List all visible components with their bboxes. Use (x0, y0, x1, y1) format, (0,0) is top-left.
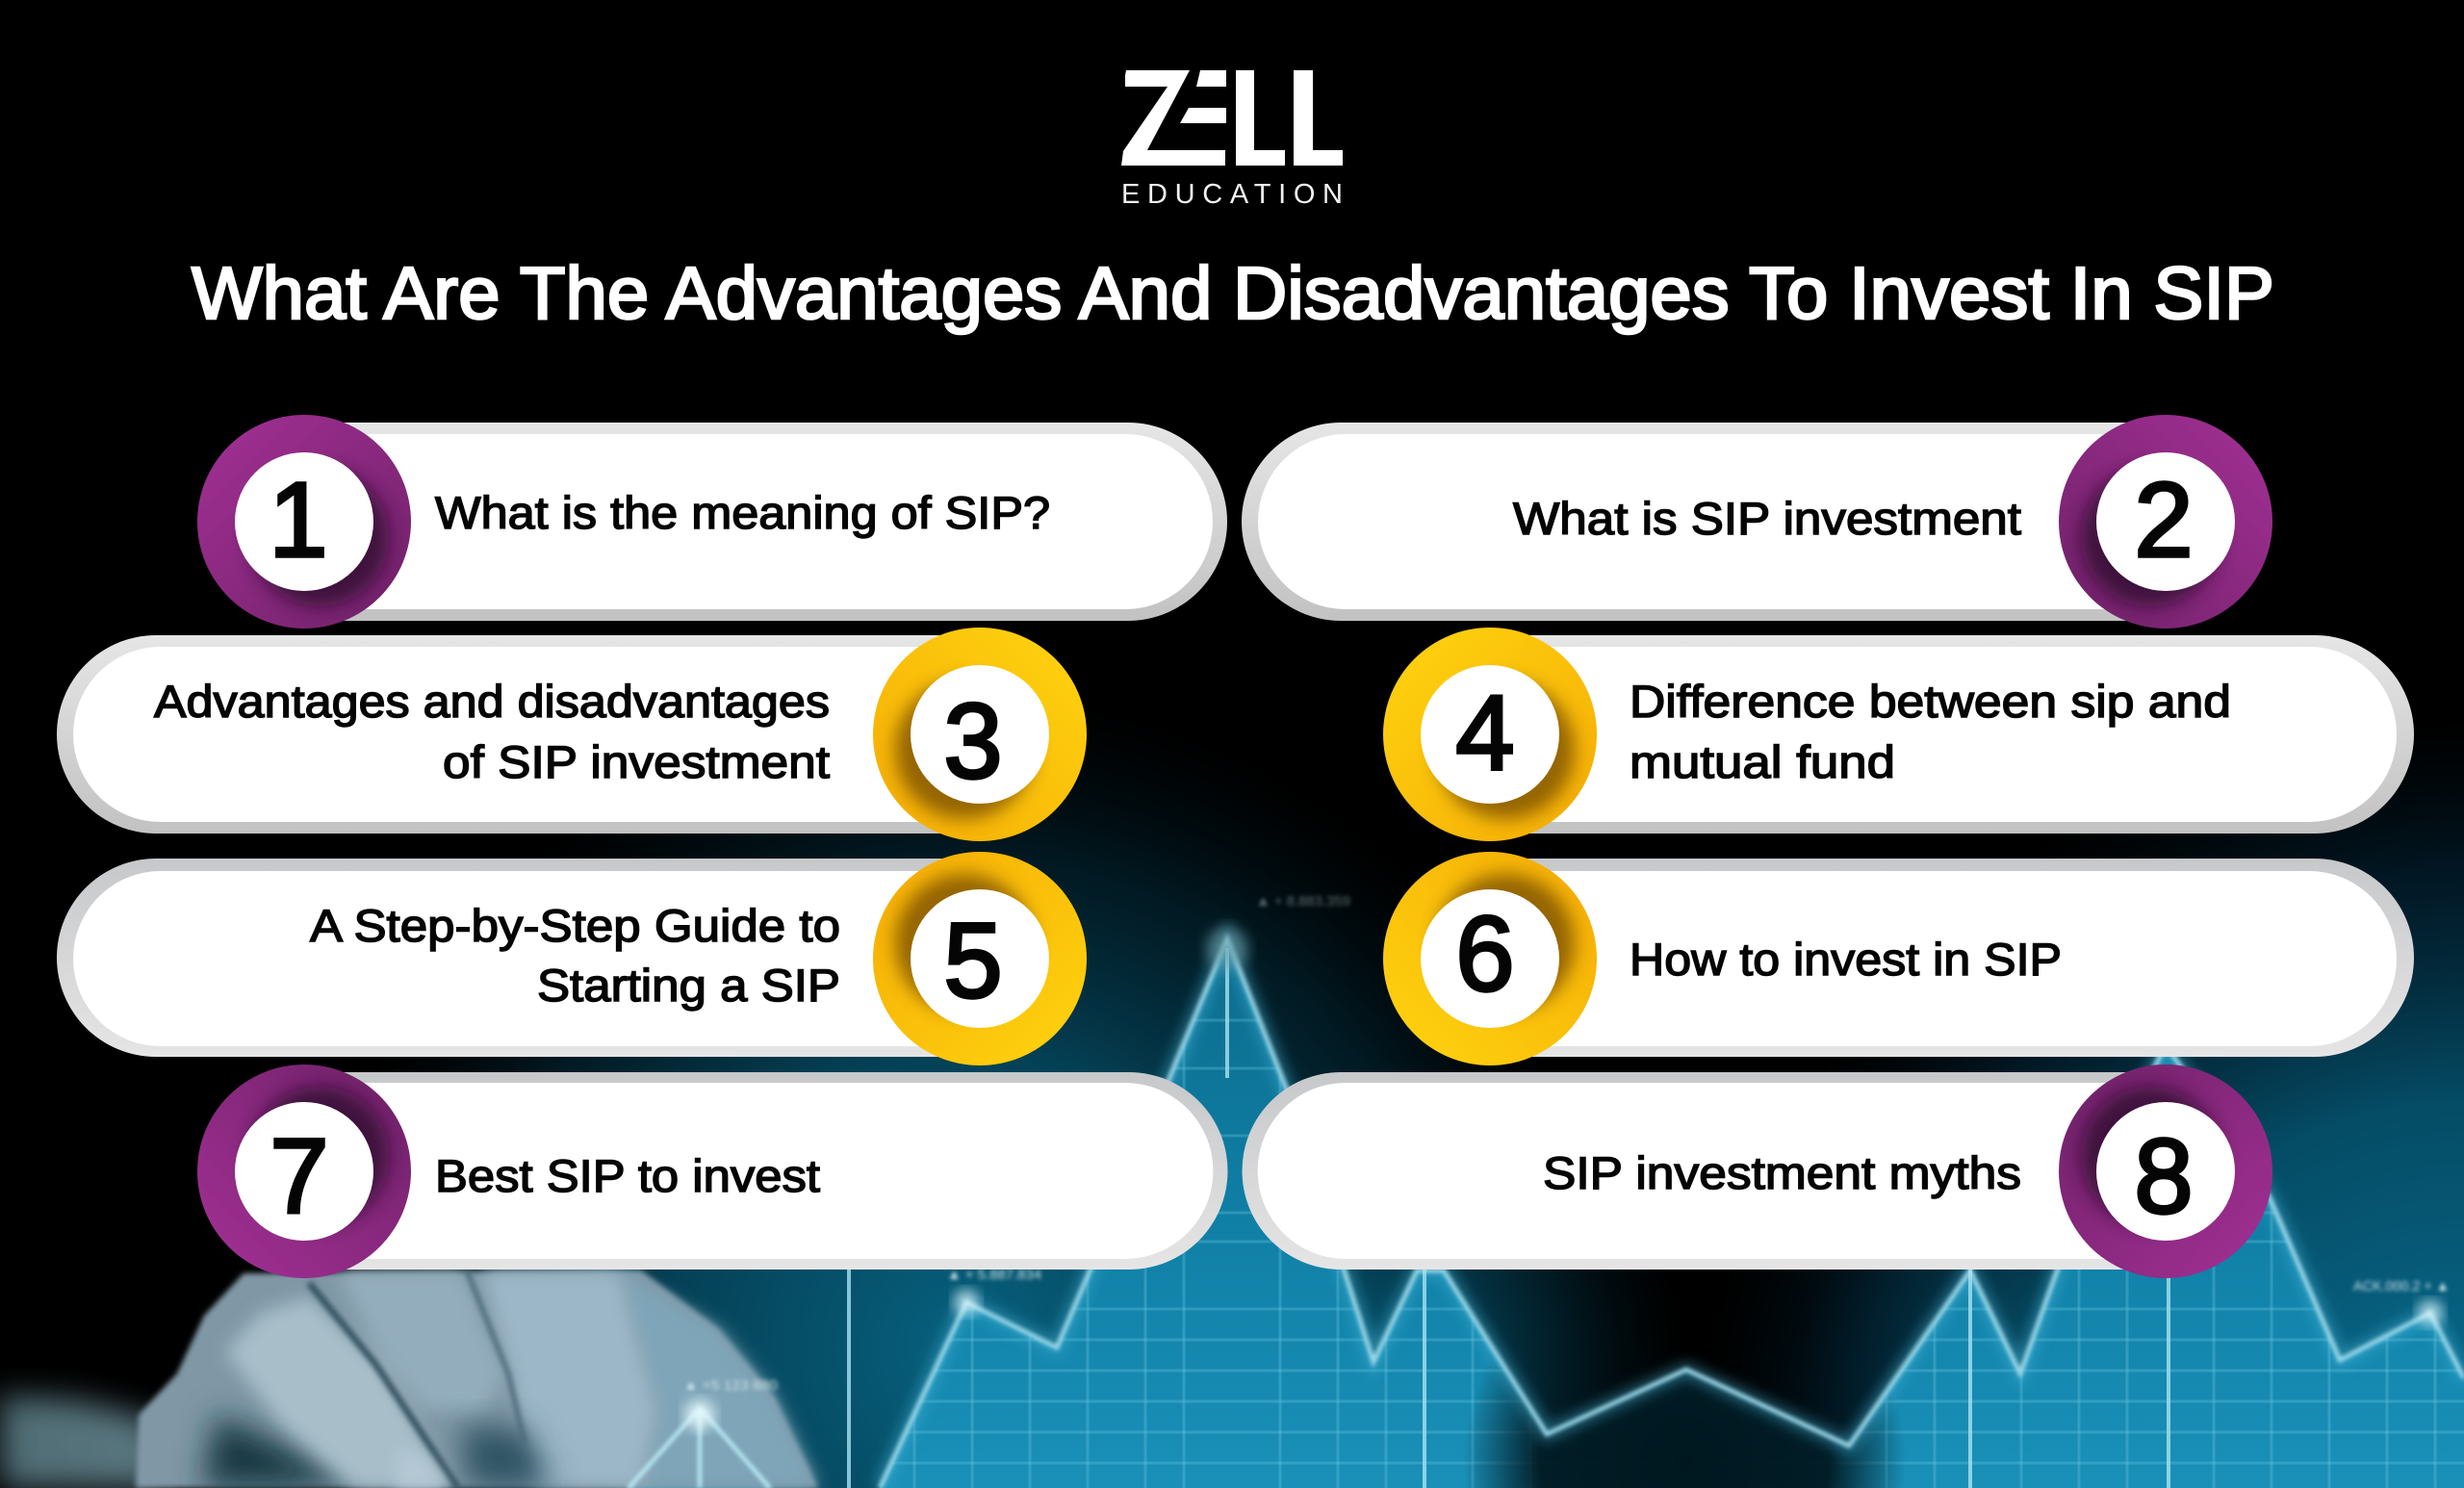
item 4: Difference between sip and mutual fund (1383, 628, 2414, 841)
item 4: Difference between sip and mutual fund: Difference between sip and (1630, 676, 2231, 727)
item 1: What is the meaning of SIP?: 1 (269, 461, 328, 579)
item 2: What is SIP investment: 2 (2134, 461, 2194, 579)
item 5: A Step-by-Step Guide to Starting a SIP: A Step-by-Step Guide to (310, 900, 840, 951)
item 3: Advantages and disadvantages of SIP investment: 3 (943, 682, 1003, 801)
item 1: What is the meaning of SIP?: What is the meaning of SIP? (435, 487, 1050, 538)
item 7: Best SIP to invest: 7 (270, 1117, 329, 1236)
item 5: A Step-by-Step Guide to Starting a SIP (57, 852, 1087, 1065)
hand chart line overlay (629, 1408, 770, 1488)
item 2: What is SIP investment (1242, 415, 2272, 629)
chart: glowing line graph with grid (626, 918, 2464, 1488)
title: What Are The Advantages And Disadvantages To Invest In SIP (192, 252, 2274, 335)
item 8: SIP investment myths: SIP investment myths (1543, 1147, 2021, 1198)
item 6: How to invest in SIP: How to invest in SIP (1630, 934, 2062, 985)
item 4: Difference between sip and mutual fund: 4 (1455, 674, 1515, 792)
item 3: Advantages and disadvantages of SIP investment: Advantages and disadvantages (154, 676, 830, 727)
chart marker: bright node on the fingertip (684, 1399, 715, 1430)
item 3: Advantages and disadvantages of SIP investment: of SIP investment (443, 736, 830, 787)
item 7: Best SIP to invest: Best SIP to invest (435, 1150, 820, 1201)
item 2: What is SIP investment: What is SIP investment (1513, 493, 2021, 544)
chart value labels: ▲ + 5.887.834 (947, 1267, 1041, 1283)
item 3: Advantages and disadvantages of SIP investment (57, 628, 1087, 841)
chart value labels: ▲ + 8.883.359 (1256, 893, 1350, 910)
item 1: What is the meaning of SIP? (197, 415, 1227, 629)
item 8: SIP investment myths (1242, 1065, 2272, 1278)
item 6: How to invest in SIP (1383, 852, 2414, 1065)
item 5: A Step-by-Step Guide to Starting a SIP: Starting a SIP (537, 960, 840, 1011)
item 7: Best SIP to invest (197, 1065, 1228, 1278)
item 4: Difference between sip and mutual fund: mutual fund (1630, 736, 1895, 787)
chart value labels (683, 893, 2450, 1394)
item 5: A Step-by-Step Guide to Starting a SIP: 5 (943, 902, 1003, 1020)
item 8: SIP investment myths: 8 (2134, 1117, 2194, 1236)
glow line (629, 938, 2464, 1488)
chart value labels: ▲ +5 123 880 (683, 1377, 778, 1394)
logo: ZELL Education: EDUCATION (1121, 179, 1343, 210)
logo: ZELL Education (1121, 70, 1343, 210)
item 6: How to invest in SIP: 6 (1455, 895, 1515, 1013)
photo: hand touching the chart (0, 1270, 818, 1488)
chart value labels: ACK.000.2 + ▲ (2353, 1278, 2450, 1295)
